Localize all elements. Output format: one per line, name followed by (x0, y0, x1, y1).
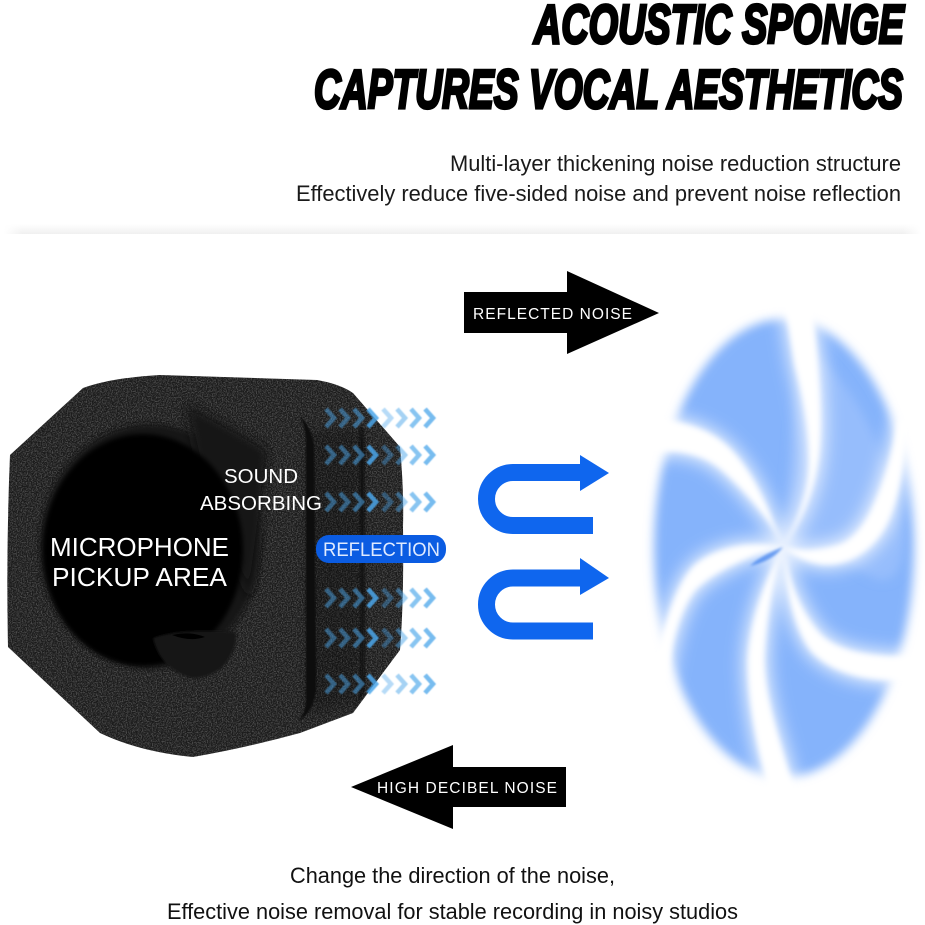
inner foam lip (153, 631, 236, 678)
swirl white arms (645, 305, 915, 795)
sound wave chevrons (326, 409, 433, 693)
caption text: Change the direction of the noise, (290, 863, 615, 888)
label: sound absorbing: SOUND (224, 465, 298, 488)
title (314, 0, 906, 120)
arrow: reflected noise (464, 271, 659, 354)
swirl soft white glow (645, 305, 915, 795)
swirl centre (750, 547, 783, 566)
label: microphone pickup area: MICROPHONE (50, 532, 229, 562)
sponge back layers (299, 416, 364, 721)
recess shadow (40, 424, 260, 668)
blue U-turn arrow: lower (486, 558, 609, 631)
subtitle text: Effectively reduce five-sided noise and prevent noise reflection (296, 181, 901, 206)
microphone opening (43, 434, 243, 666)
caption text (167, 863, 738, 924)
reflection pill label: REFLECTION (323, 539, 440, 561)
foam sponge windscreen (7, 375, 403, 757)
blue U-turn arrow: upper (486, 455, 609, 526)
arrow: high decibel noise: HIGH DECIBEL NOISE (377, 780, 557, 797)
arrow: high decibel noise (351, 745, 566, 829)
blue noise swirl (645, 305, 915, 795)
subtitle text (296, 151, 901, 206)
label: microphone pickup area: PICKUP AREA (52, 562, 228, 592)
caption text: Effective noise removal for stable recording in noisy studios (167, 899, 738, 924)
subtitle text: Multi-layer thickening noise reduction structure (450, 151, 901, 176)
label: sound absorbing: ABSORBING (200, 492, 322, 515)
label: sound absorbing (200, 465, 322, 515)
arrow: reflected noise: REFLECTED NOISE (473, 306, 632, 323)
label: microphone pickup area (50, 532, 229, 592)
